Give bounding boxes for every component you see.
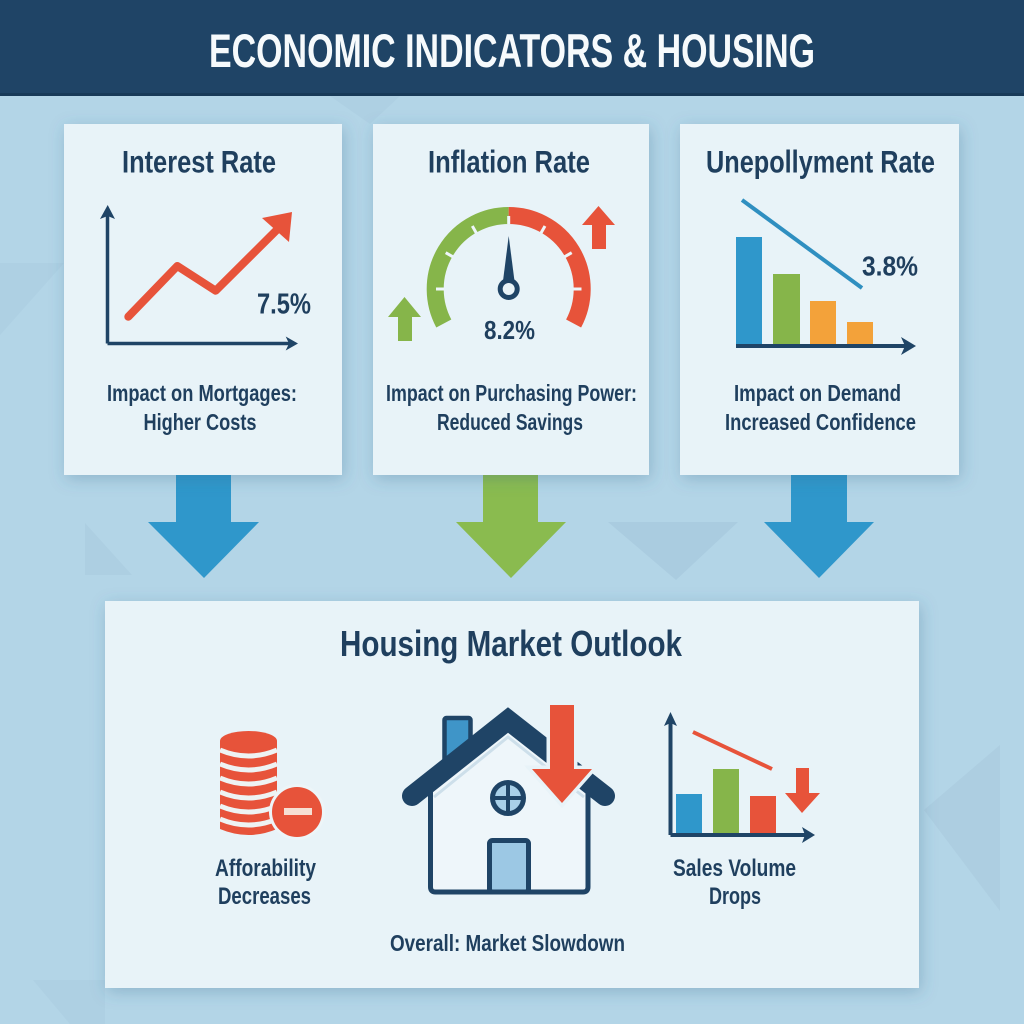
text: impact on mortgages bbox=[107, 380, 297, 435]
text: impact on mortgages: Higher Costs bbox=[144, 409, 256, 435]
panel: inflation rate bbox=[373, 124, 649, 475]
label: sales volume: Sales Volume bbox=[673, 855, 796, 882]
panel: unemployment rate bbox=[680, 124, 959, 475]
bar chart: sales volume bbox=[664, 712, 820, 843]
panel: housing market outlook bbox=[105, 601, 919, 988]
text: impact on demand: Increased Confidence bbox=[725, 409, 916, 435]
text: impact on mortgages: Impact on Mortgages: bbox=[107, 380, 297, 406]
label: sales volume bbox=[673, 855, 796, 910]
text: impact on purchasing power bbox=[386, 380, 637, 435]
title: ECONOMIC INDICATORS & HOUSING bbox=[209, 24, 815, 77]
panel: interest rate bbox=[64, 124, 342, 475]
label: affordability bbox=[215, 855, 317, 910]
value: 3.8%: 3.8% bbox=[862, 250, 918, 282]
arrow: inflation rate down bbox=[456, 470, 566, 578]
text: impact on purchasing power: Reduced Savings bbox=[437, 409, 583, 435]
label: sales volume: Drops bbox=[709, 883, 761, 910]
header banner bbox=[0, 0, 1024, 96]
heading: interest rate: Interest Rate bbox=[122, 144, 276, 180]
icon: house with down arrow bbox=[412, 705, 605, 892]
icon: coin stack with minus bbox=[220, 731, 325, 840]
arrow: interest rate down bbox=[148, 470, 259, 578]
value: 7.5%: 7.5% bbox=[257, 288, 311, 320]
text: impact on demand bbox=[725, 380, 916, 435]
label: affordability: Afforability bbox=[215, 855, 317, 882]
icon: green up arrow bbox=[388, 297, 421, 341]
heading: housing market outlook: Housing Market Outlook bbox=[340, 623, 683, 664]
value: 8.2%: 8.2% bbox=[484, 315, 535, 345]
icon: red up arrow bbox=[582, 206, 615, 249]
heading: inflation rate: Inflation Rate bbox=[428, 144, 590, 180]
gauge: inflation bbox=[435, 215, 582, 324]
label: affordability: Decreases bbox=[218, 883, 311, 910]
text: overall market slowdown: Overall: Market Slowdown bbox=[390, 930, 625, 956]
bar chart: unemployment bbox=[736, 200, 916, 355]
line chart: interest rate bbox=[100, 205, 298, 350]
text: impact on demand: Impact on Demand bbox=[734, 380, 901, 406]
arrow: unemployment rate down bbox=[764, 470, 874, 578]
text: impact on purchasing power: Impact on Purchasing Power: bbox=[386, 380, 637, 406]
heading: unemployment rate: Unepollyment Rate bbox=[706, 144, 935, 180]
